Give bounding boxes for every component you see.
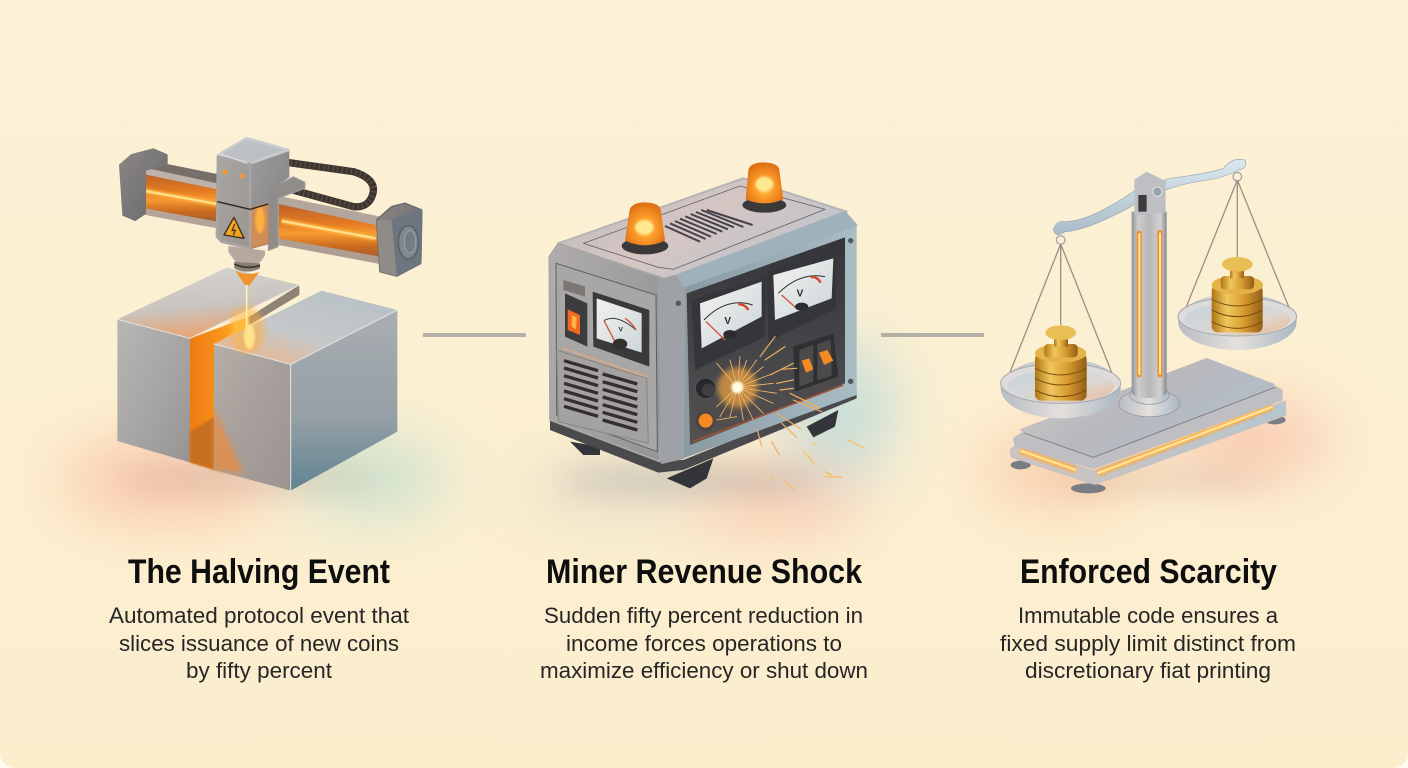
left metal block xyxy=(117,268,299,470)
column 1 description: Automated protocol event that xyxy=(109,603,410,628)
right chains xyxy=(1185,172,1290,310)
side vent xyxy=(557,348,648,443)
column 1 heading: The Halving Event xyxy=(128,553,390,591)
laser gantry rail, right xyxy=(278,196,380,264)
right voltmeter xyxy=(767,252,836,342)
laser head carriage xyxy=(217,138,305,251)
right pan xyxy=(1178,293,1297,350)
column 1 description xyxy=(109,603,410,683)
label plate xyxy=(563,280,585,297)
column 1 description: by fifty percent xyxy=(186,658,333,683)
top vent slats xyxy=(665,210,753,242)
laser gantry end cap, right xyxy=(377,203,422,276)
column 3 description: fixed supply limit distinct from xyxy=(1000,631,1296,656)
soft floor shadows xyxy=(120,464,1270,494)
column 2 description: Sudden fifty percent reduction in xyxy=(544,603,863,628)
card bottom corners xyxy=(0,754,1408,768)
cable carrier xyxy=(282,162,373,207)
icon: warning triangle xyxy=(224,217,244,238)
left pan xyxy=(1001,358,1121,418)
rocker switch xyxy=(565,293,587,347)
small voltmeter xyxy=(593,292,649,367)
column 2 heading: Miner Revenue Shock xyxy=(546,553,862,591)
small voltmeter: V xyxy=(618,327,623,334)
column 3 description: Immutable code ensures a xyxy=(1018,603,1278,628)
control knob and orange button xyxy=(695,378,716,431)
column 2 description: maximize efficiency or shut down xyxy=(540,658,868,683)
icon: balance scale with gold weights xyxy=(1001,159,1297,493)
column 3 heading: Enforced Scarcity xyxy=(1020,553,1277,591)
ambient colored glows xyxy=(60,340,1330,528)
right voltmeter: V xyxy=(797,289,804,300)
left voltmeter xyxy=(692,277,765,370)
column 2 description xyxy=(540,603,868,683)
laser gantry rail, left xyxy=(140,161,217,228)
column 3 description: discretionary fiat printing xyxy=(1025,658,1271,683)
unit base xyxy=(550,390,857,473)
laser beam and cutting glow xyxy=(228,285,265,353)
unit feet xyxy=(570,410,838,488)
scale beam and pivot xyxy=(1053,159,1246,235)
connector line 2 xyxy=(881,333,984,337)
left chains xyxy=(1008,236,1113,377)
unit top face xyxy=(558,178,847,278)
left voltmeter: V xyxy=(724,316,731,327)
icon: laser cutter slicing a metal block xyxy=(117,138,422,491)
scale column xyxy=(1119,212,1180,417)
sparks burst xyxy=(717,337,864,490)
unit left panel xyxy=(549,243,663,462)
laser gantry end cap, left xyxy=(120,149,167,220)
right gold weight xyxy=(1212,257,1263,332)
connector line 1 xyxy=(423,333,526,337)
unit right panel xyxy=(658,212,857,463)
column 2 description: income forces operations to xyxy=(566,631,842,656)
beacon lights xyxy=(622,162,786,254)
laser nozzle xyxy=(228,246,265,286)
scale base xyxy=(1011,359,1286,493)
icon: miner power unit with sparks xyxy=(549,162,864,490)
column 1 description: slices issuance of new coins xyxy=(119,631,399,656)
column 3 description xyxy=(1000,603,1296,683)
toggle switches xyxy=(793,333,838,392)
left gold weight xyxy=(1035,325,1087,401)
right metal block xyxy=(214,291,397,491)
